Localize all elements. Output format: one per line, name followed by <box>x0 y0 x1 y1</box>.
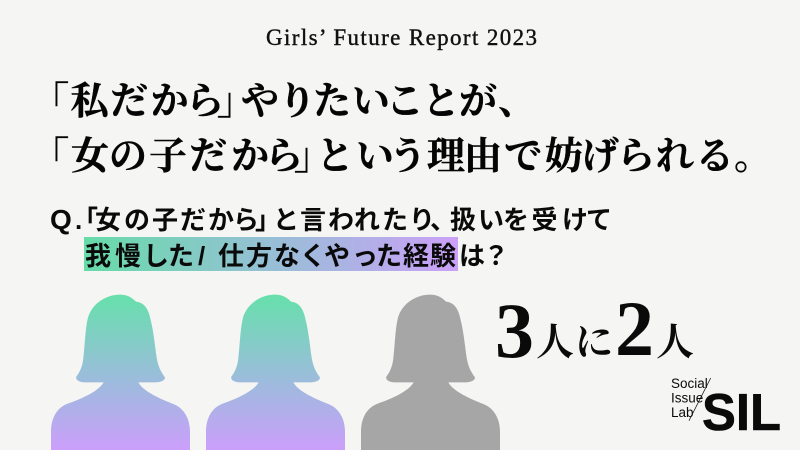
statistic: 3 in 2: 2 <box>615 285 654 372</box>
question line 1: Q <box>50 204 72 235</box>
report label: Girls’ Future Report 2023 <box>266 25 537 50</box>
icon: gradient person 2 <box>206 295 345 450</box>
question line 1: 「女の子だから」と言われたり、扱いを受けて <box>72 205 612 235</box>
question line 1: . <box>75 205 82 235</box>
highlight band <box>84 237 458 271</box>
logo: Social Issue Lab SIL: SIL <box>702 384 781 442</box>
statistic: 3 in 2: 人 <box>656 322 694 364</box>
statistic: 3 in 2 <box>495 285 694 374</box>
main heading: 「私だから」やりたいことが、 <box>31 81 536 123</box>
logo: Social Issue Lab SIL: Issue <box>671 390 703 406</box>
statistic: 3 in 2: 人に <box>536 322 613 364</box>
icon: grey person 3 <box>361 295 500 450</box>
main heading <box>31 81 772 178</box>
logo: Social Issue Lab SIL: Lab <box>671 405 694 420</box>
main heading: 「女の子だから」という理由で妨げられる。 <box>31 136 772 178</box>
statistic: 3 in 2: 3 <box>495 287 534 374</box>
logo: Social Issue Lab SIL: Social <box>671 376 708 391</box>
icon: gradient person 1 <box>51 295 190 450</box>
question line 2: 我慢した/仕方なくやった経験は？ <box>85 241 509 271</box>
logo: Social Issue Lab SIL <box>671 376 781 442</box>
question <box>50 204 612 271</box>
